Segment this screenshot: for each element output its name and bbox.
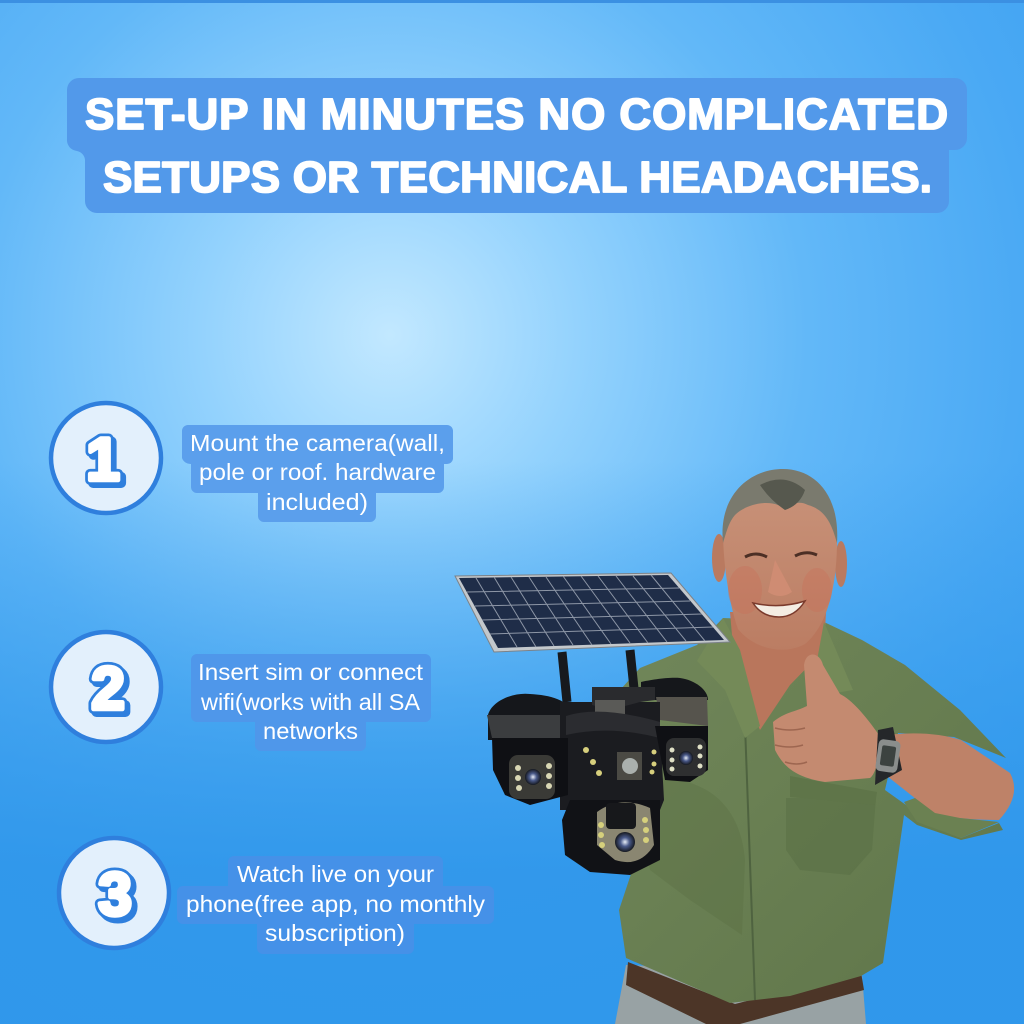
title banner: SETUPS OR TECHNICAL HEADACHES. — [103, 153, 932, 202]
right camera — [655, 726, 708, 782]
step 1 text: Mount the camera(wall, — [190, 430, 445, 456]
step 2 badge: 2 — [91, 655, 125, 722]
eyes — [745, 553, 817, 557]
step 3 text: subscription) — [265, 920, 405, 946]
man with thumbs up — [615, 469, 1014, 1024]
poles — [562, 652, 567, 702]
step 2 text — [191, 654, 431, 751]
hair — [722, 469, 837, 543]
ears — [712, 534, 726, 582]
step 1 badge — [51, 403, 161, 513]
placket — [745, 725, 755, 1000]
step 2 text: Insert sim or connect — [198, 659, 424, 685]
step 3 badge: 3 — [101, 864, 135, 931]
lower sleeve — [904, 798, 999, 838]
step 3 badge — [59, 838, 169, 948]
step 2 text: wifi(works with all SA — [200, 689, 421, 715]
hand and thumb — [773, 654, 880, 782]
belt — [626, 962, 864, 1024]
nose — [768, 560, 792, 596]
step 2 badge: 2 — [91, 655, 125, 722]
smile — [753, 601, 805, 617]
center sensor and LEDs — [583, 747, 656, 780]
left dome — [488, 694, 572, 740]
jeans — [615, 965, 866, 1024]
title banner: SET-UP IN MINUTES NO COMPLICATED — [85, 90, 948, 139]
neck — [730, 612, 826, 730]
step 3 text: phone(free app, no monthly — [186, 891, 486, 917]
bottom camera — [562, 800, 660, 875]
shirt shading — [632, 778, 745, 935]
center housing — [560, 702, 664, 810]
step 1 text: included) — [266, 489, 368, 515]
face — [723, 476, 837, 650]
step 2 text: networks — [263, 718, 358, 744]
shirt — [619, 618, 1006, 1003]
step 3 text — [177, 856, 494, 954]
collar — [697, 618, 760, 738]
step 1 badge: 1 — [86, 426, 120, 493]
watch — [875, 727, 902, 785]
step 3 badge: 3 — [98, 861, 132, 928]
step 1 text — [182, 425, 453, 522]
left camera — [492, 738, 568, 805]
step 1 text: pole or roof. hardware — [199, 459, 436, 485]
title banner — [67, 78, 967, 213]
step 2 badge: 2 — [94, 658, 128, 725]
shirt pocket — [786, 798, 876, 875]
step 1 badge: 1 — [86, 426, 120, 493]
cheeks — [728, 566, 762, 614]
step 2 badge — [51, 632, 161, 742]
right dome — [641, 678, 708, 700]
solar camera — [455, 573, 730, 875]
top strip — [0, 0, 1024, 3]
solar panel — [455, 573, 730, 652]
step 3 badge: 3 — [98, 861, 132, 928]
step 3 text: Watch live on your — [237, 861, 434, 887]
forearm — [885, 733, 1014, 820]
step 1 badge: 1 — [89, 429, 123, 496]
